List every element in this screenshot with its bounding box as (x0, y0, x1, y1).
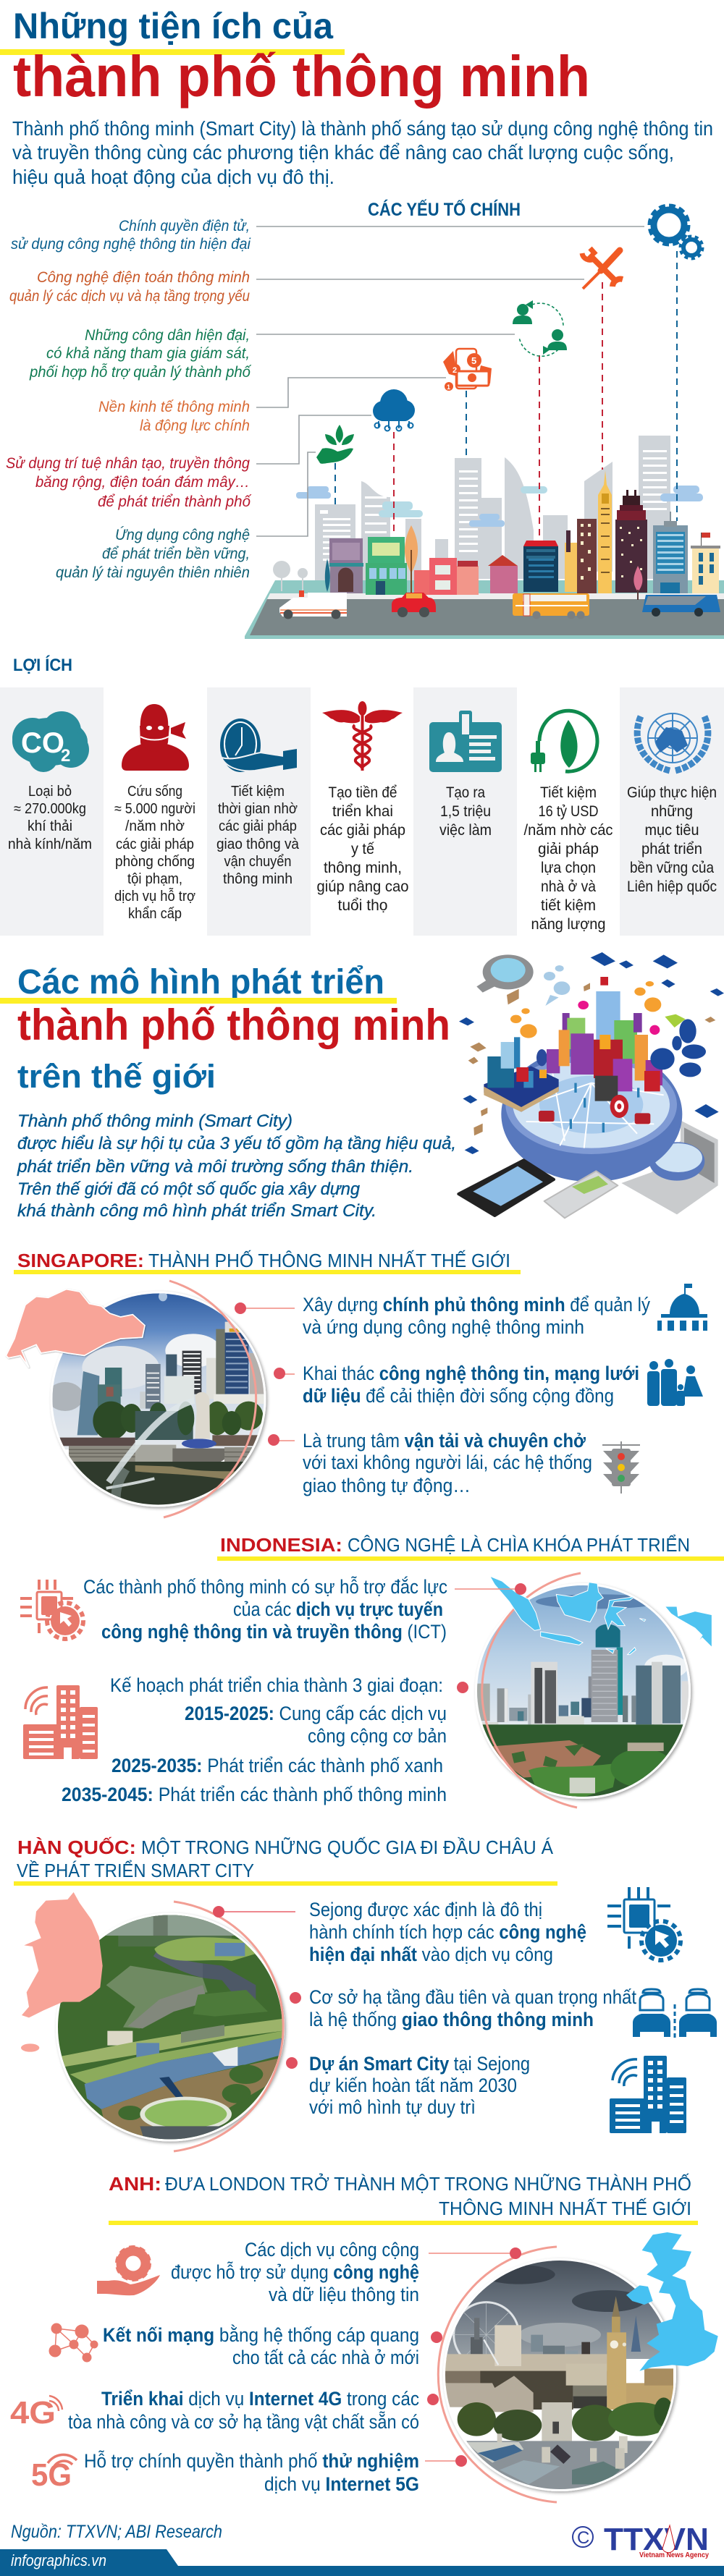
text: UK point 4: dịch vụ Internet 5G (264, 2473, 419, 2495)
text: Singapore point 3: giao thông tự động… (303, 1475, 471, 1496)
text: UK point 4 (84, 2449, 419, 2495)
text: Singapore point 1 (303, 1294, 650, 1338)
section header: Singapore: SINGAPORE: (17, 1250, 144, 1271)
arc: London (438, 2247, 557, 2502)
callout markers: South Korea (213, 1906, 301, 2069)
factor labels (6, 218, 252, 581)
benefit: healthcare: các giải pháp (320, 822, 405, 839)
heading: main factors: CÁC YẾU TỐ CHÍNH (368, 198, 521, 220)
benefit: money saved: nhà ở và (541, 878, 596, 895)
icon: network (49, 2323, 98, 2362)
icon: smart economy: 2 (452, 366, 457, 375)
TTXVN logo: Vietnam News Agency (639, 2551, 709, 2559)
label: modern citizens: có khả năng tham gia giám sát, (46, 345, 250, 362)
icon: CO2 cloud (12, 711, 89, 772)
icon: chip and gear (blue) (607, 1887, 681, 1960)
parcels (468, 983, 715, 1135)
text: UK point 3 (68, 2388, 419, 2433)
magnifier (476, 954, 534, 993)
blue bus (642, 595, 720, 617)
benefit: lives saved: các giải pháp (116, 836, 194, 852)
text: Indonesia point 1 (83, 1575, 447, 1643)
label: smart economy: Nền kinh tế thông minh (98, 399, 250, 415)
benefit: time saved: Tiết kiệm (231, 784, 285, 800)
icon: leaf and plug (531, 711, 597, 772)
label: e-government: sử dụng công nghệ thông tin hiện đại (11, 236, 251, 253)
definition paragraph: được hiểu là sự hội tụ của 3 yếu tố gồm hạ tầng hiệu quả, (17, 1134, 456, 1153)
benefit: jobs (439, 784, 492, 839)
icon: clock and hand (220, 719, 297, 772)
label: smart computing (9, 269, 250, 305)
photo: Sejong city (56, 1912, 285, 2142)
arc: Indonesia (482, 1573, 581, 1808)
ground and road (245, 580, 724, 639)
benefit: UN goals: Liên hiệp quốc (627, 878, 717, 895)
text: UK point 1: Các dịch vụ công cộng (245, 2239, 419, 2261)
label: sustainability (56, 527, 250, 581)
text: Korea point 3: với mô hình tự duy trì (309, 2096, 476, 2118)
arc: Singapore (164, 1281, 256, 1517)
benefit: lives saved: tội phạm, (127, 871, 182, 887)
section title: development models: thành phố thông minh (17, 1001, 450, 1049)
coloured buildings (273, 470, 720, 600)
arc: South Korea (174, 1902, 283, 2151)
section header: South Korea: MỘT TRONG NHỮNG QUỐC GIA ĐI ĐẦU CHÂU Á (141, 1836, 554, 1858)
photo: London (442, 2258, 678, 2494)
photo: Singapore skyline (47, 1290, 268, 1510)
benefit: lives saved: ≈ 5.000 người (114, 801, 195, 817)
icon: traffic light (602, 1441, 640, 1494)
benefit: lives saved (114, 784, 195, 922)
text: Singapore point 2 (303, 1363, 639, 1407)
benefit: UN goals: mục tiêu (644, 822, 699, 839)
callout markers: London (425, 2247, 521, 2467)
clouds (296, 486, 703, 527)
benefit: greenhouse gas: Loại bỏ (28, 784, 72, 800)
icon: traffic cars (633, 1989, 717, 2038)
benefit: money saved: 16 tỷ USD (539, 803, 598, 820)
icon: government building (657, 1284, 707, 1331)
label: smart computing: quản lý các dịch vụ và hạ tầng trọng yếu (9, 288, 250, 305)
icon: smart economy: 5 (471, 355, 476, 366)
city on the disc (484, 977, 662, 1132)
section title: development models: trên thế giới (17, 1058, 216, 1095)
benefit: lives saved: Cứu sống (127, 784, 182, 800)
benefit: time saved (216, 784, 300, 887)
benefit: UN goals: phát triển (641, 841, 702, 857)
connector lines (256, 226, 644, 536)
benefit: healthcare: thông minh, (324, 860, 402, 876)
benefit: time saved: giao thông và (216, 836, 300, 852)
icon: family (647, 1359, 703, 1406)
icon: caduceus (322, 701, 403, 771)
label: AI and broadband: để phát triển thành phố (98, 493, 252, 510)
footer band: infographics.vn (11, 2551, 106, 2569)
label: AI and broadband (6, 455, 252, 510)
text: Singapore point 1: Xây dựng chính phủ thông minh để quản lý (303, 1294, 650, 1315)
icon: UN emblem (637, 713, 708, 771)
definition paragraph: phát triển bền vững và môi trường sống thân thiện. (17, 1157, 413, 1177)
text: UK point 3: tòa nhà công và cơ sở hạ tầng vật chất sẵn có (68, 2410, 419, 2433)
section header: Singapore (14, 1250, 521, 1274)
text: Indonesia phases (62, 1674, 447, 1805)
photo: Jakarta skyline (473, 1583, 693, 1802)
icon: cloud (373, 389, 415, 431)
text: Indonesia phases: 2025-2035: Phát triển các thành phố xanh (111, 1755, 443, 1776)
text: Singapore point 3: Là trung tâm vận tải và chuyên chở (303, 1430, 586, 1452)
benefit: healthcare: tuổi thọ (337, 897, 388, 914)
text: UK point 3: Triển khai dịch vụ Internet 4G trong các (101, 2388, 419, 2410)
section header: Indonesia (217, 1534, 724, 1561)
text: Indonesia phases: công cộng cơ bản (308, 1725, 447, 1747)
benefit: healthcare: giúp nâng cao (317, 878, 408, 895)
benefit: greenhouse gas: ≈ 270.000kg (14, 801, 86, 817)
yellow bus (513, 593, 589, 619)
icon: gears (650, 206, 702, 258)
icon: hand with leaves (316, 425, 354, 464)
dashed drop lines (335, 251, 677, 540)
benefit: money saved (524, 784, 613, 933)
section header: UK (109, 2172, 698, 2225)
red car (392, 593, 436, 617)
label: modern citizens: phối hợp hỗ trợ quản lý thành phố (29, 364, 252, 381)
definition paragraph (17, 1111, 456, 1221)
benefit: money saved: lựa chọn (541, 860, 596, 876)
benefit: healthcare: triển khai (332, 803, 393, 820)
text: Singapore point 3: với taxi không người lái, các hệ thống (303, 1452, 592, 1473)
label: smart computing: Công nghệ điện toán thông minh (37, 269, 250, 286)
intro text: và truyền thông cùng các phương tiện khác để nâng cao chất lượng cuộc sống, (12, 141, 674, 164)
callout markers: Singapore (235, 1302, 295, 1446)
map: Indonesia (490, 1576, 712, 1655)
text: UK point 1: và dữ liệu thông tin (269, 2284, 419, 2305)
label: modern citizens: Những công dân hiện đại, (85, 327, 250, 344)
heading: benefits: LỢI ÍCH (13, 655, 72, 675)
benefit: time saved: thông minh (223, 871, 292, 887)
TTXVN logo: C (577, 2528, 589, 2548)
benefit: time saved: các giải pháp (219, 818, 297, 834)
swirl and palm (650, 1014, 706, 1077)
text: Korea point 1: hiện đại nhất vào dịch vụ công (309, 1944, 553, 1965)
icon: wrench and screwdriver (582, 248, 623, 289)
text: Korea point 2: Cơ sở hạ tầng đầu tiên và quan trọng nhất (309, 1986, 636, 2008)
title: Những tiện ích của (13, 6, 334, 46)
benefit: money saved: Tiết kiệm (540, 784, 597, 801)
benefit: healthcare (317, 784, 408, 914)
text: Korea point 1: hành chính tích hợp các công nghệ (309, 1921, 586, 1943)
section title: development models (0, 963, 450, 1095)
benefit: jobs: 1,5 triệu (440, 803, 491, 820)
benefit: greenhouse gas: nhà kính/năm (8, 836, 92, 852)
benefit: money saved: năng lượng (531, 916, 605, 933)
benefit: UN goals: Giúp thực hiện (627, 784, 717, 801)
text: Singapore point 2: Khai thác công nghệ thông tin, mạng lưới (303, 1363, 639, 1384)
section header: South Korea: HÀN QUỐC: (17, 1836, 136, 1858)
icon: 4G: 4G (10, 2395, 56, 2431)
section header: Indonesia: CÔNG NGHỆ LÀ CHÌA KHÓA PHÁT TRIỂN (348, 1534, 690, 1556)
benefit: money saved: tiết kiệm (541, 897, 596, 914)
benefit: jobs: việc làm (439, 822, 492, 839)
text: Korea point 1 (309, 1899, 586, 1965)
benefit: lives saved: /năm nhờ (125, 818, 185, 834)
text: UK point 4: Hỗ trợ chính quyền thành phố thử nghiệm (84, 2449, 419, 2472)
benefit: lives saved: khẩn cấp (128, 906, 182, 922)
laptop (621, 1120, 718, 1214)
text: Korea point 1: Sejong được xác định là đô thị (309, 1899, 542, 1920)
intro text: hiệu quả hoạt động của dịch vụ đô thị. (12, 166, 334, 188)
text: Indonesia phases: 2015-2025: Cung cấp các dịch vụ (185, 1703, 447, 1724)
windows (529, 559, 554, 578)
text: UK point 1: được hỗ trợ sử dụng công nghệ (171, 2261, 419, 2283)
text: UK point 2 (103, 2323, 419, 2368)
definition paragraph: khá thành công mô hình phát triển Smart City. (17, 1201, 376, 1221)
benefit: money saved: giải pháp (538, 841, 599, 857)
label: sustainability: Ứng dụng công nghệ (115, 527, 250, 543)
title (0, 6, 590, 109)
text: Indonesia point 1: Các thành phố thông minh có sự hỗ trợ đắc lực (83, 1575, 447, 1598)
text: Korea point 3: Dự án Smart City tại Sejong (309, 2053, 530, 2075)
text: Indonesia phases: Kế hoạch phát triển chia thành 3 giai đoạn: (110, 1674, 443, 1696)
callout markers: Indonesia (455, 1583, 526, 1693)
benefit: healthcare: y tế (351, 841, 374, 857)
benefit: time saved: vận chuyển (224, 854, 291, 870)
speech bubbles (510, 965, 661, 1038)
benefit: healthcare: Tạo tiền để (329, 784, 397, 801)
illustration: smart city on a disc with devices (458, 952, 724, 1218)
icon: 5G: 5G (31, 2457, 72, 2493)
icon: smart building (23, 1685, 98, 1759)
city illustration (245, 436, 724, 639)
text: UK point 2: Kết nối mạng bằng hệ thống cáp quang (103, 2323, 419, 2346)
text: Korea point 3 (309, 2053, 530, 2118)
icon: CO2 cloud: 2 (61, 746, 70, 766)
benefit: jobs: Tạo ra (446, 784, 485, 801)
label: smart economy: là động lực chính (140, 418, 250, 434)
intro text (12, 117, 713, 188)
small disc (649, 1142, 704, 1181)
text: UK point 2: cho tất cả các nhà ở mới (232, 2347, 419, 2368)
section title: development models: Các mô hình phát triển (17, 963, 384, 1001)
benefit: greenhouse gas (8, 784, 92, 852)
label: e-government (11, 218, 251, 253)
benefit: UN goals (627, 784, 717, 895)
icon: hand with gear (97, 2247, 160, 2295)
label: AI and broadband: Sử dụng trí tuệ nhân tạo, truyền thông (6, 455, 250, 472)
source note: Nguồn: TTXVN; ABI Research (11, 2522, 222, 2542)
benefit: UN goals: bền vững của (630, 860, 714, 876)
section header: Indonesia: INDONESIA: (220, 1534, 342, 1556)
label: modern citizens (29, 327, 252, 381)
section header: UK: THÔNG MINH NHẤT THẾ GIỚI (439, 2198, 691, 2219)
map: UK (626, 2232, 718, 2371)
map: Singapore (6, 1289, 145, 1368)
black smartphone (458, 1160, 554, 1216)
footer band (0, 2549, 724, 2576)
label: sustainability: để phát triển bền vững, (102, 546, 250, 562)
text: Singapore point 3 (303, 1430, 592, 1496)
label: AI and broadband: băng rộng, điện toán đám mây… (35, 474, 250, 491)
text: Korea point 2 (309, 1986, 636, 2030)
panel: benefits (0, 687, 724, 936)
icon: smart economy: 1 (447, 384, 450, 391)
text: Indonesia phases: 2035-2045: Phát triển các thành phố thông minh (62, 1784, 447, 1805)
label: smart economy (98, 399, 250, 434)
section header: UK: ANH: (109, 2173, 161, 2195)
envelopes (459, 952, 724, 1154)
benefit: UN goals: những (651, 803, 693, 820)
label: sustainability: quản lý tài nguyên thiên nhiên (56, 564, 250, 581)
icon: smart building (blue) (610, 2056, 686, 2133)
text: Korea point 3: dự kiến hoàn tất năm 2030 (309, 2075, 517, 2096)
icon: citizens (513, 300, 567, 356)
disc (501, 1047, 682, 1182)
definition paragraph: Thành phố thông minh (Smart City) (17, 1111, 292, 1131)
icon: ID card (429, 711, 502, 772)
text: Singapore point 1: và ứng dụng công nghệ thông minh (303, 1316, 584, 1338)
keypad phone (544, 1171, 618, 1218)
section header: UK: ĐƯA LONDON TRỞ THÀNH MỘT TRONG NHỮNG THÀNH PHỐ (165, 2172, 691, 2195)
ambulance (279, 590, 347, 619)
TTXVN logo: TTXVN (604, 2522, 709, 2557)
label: e-government: Chính quyền điện tử, (119, 218, 250, 234)
text: Indonesia point 1: công nghệ thông tin và truyền thông (ICT) (101, 1621, 447, 1643)
title: thành phố thông minh (13, 44, 590, 109)
text: Singapore point 2: dữ liệu để cải thiện đời sống cộng đồng (303, 1385, 614, 1407)
benefit: greenhouse gas: khí thải (28, 818, 72, 834)
benefit: lives saved: phòng chống (115, 854, 195, 870)
section header: Singapore: THÀNH PHỐ THÔNG MINH NHẤT THẾ GIỚI (148, 1250, 510, 1271)
text: UK point 1 (171, 2239, 419, 2305)
text: Korea point 2: là hệ thống giao thông thông minh (309, 2009, 594, 2030)
text: Indonesia point 1: của các dịch vụ trực tuyến (233, 1598, 443, 1620)
icon: masked criminal (122, 704, 189, 771)
icon: CO2 cloud: CO (21, 727, 64, 759)
benefit: lives saved: dịch vụ hỗ trợ (114, 888, 195, 904)
definition paragraph: Trên thế giới đã có một số quốc gia xây dựng (17, 1179, 361, 1199)
section header: South Korea (14, 1836, 557, 1886)
icon: smart economy (443, 349, 492, 391)
benefit: time saved: thời gian nhờ (218, 801, 298, 817)
section header: South Korea: VỀ PHÁT TRIỂN SMART CITY (17, 1860, 254, 1881)
map: South Korea (21, 1892, 103, 2052)
icon: chip and gear (20, 1580, 83, 1639)
benefit: money saved: /năm nhờ các (524, 822, 613, 839)
